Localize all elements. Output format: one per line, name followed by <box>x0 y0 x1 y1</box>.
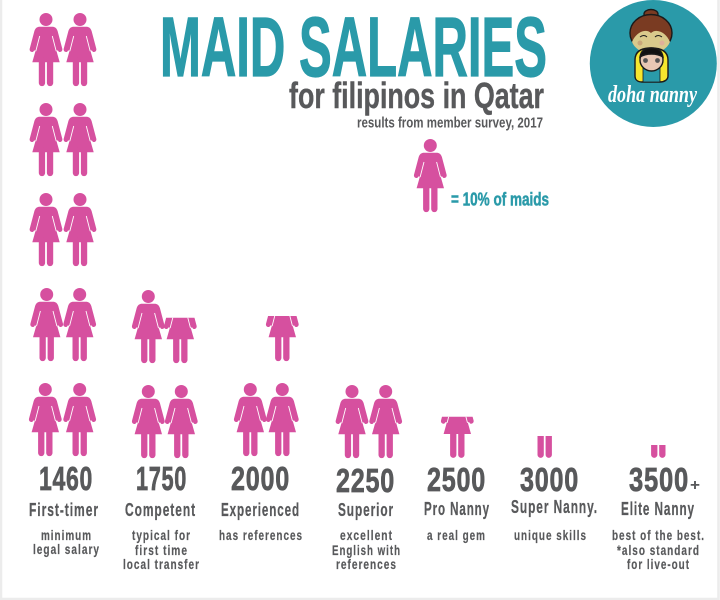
description: legal salary <box>33 541 100 557</box>
column: 3500+ Elite Nanny <box>612 445 704 570</box>
column: 1750 Competent <box>123 290 200 572</box>
description <box>612 527 705 572</box>
level: Pro Nanny <box>424 499 490 519</box>
description: typical for <box>132 527 191 543</box>
salary: 3000 <box>520 461 579 498</box>
level: Experienced <box>221 500 300 520</box>
description <box>123 527 200 572</box>
pictogram stack: 10 women <box>29 13 96 453</box>
subtitle: for filipinos in Qatar <box>289 75 544 116</box>
description: unique skills <box>514 527 587 543</box>
description: has references <box>219 527 303 543</box>
pictogram: partial woman <box>651 445 666 458</box>
description: English with <box>332 542 401 558</box>
legend <box>414 139 549 210</box>
description: references <box>336 556 397 572</box>
description: for live-out <box>627 556 690 572</box>
description: local transfer <box>123 556 200 572</box>
column: 2500 Pro Nanny <box>424 416 490 544</box>
level: Superior <box>338 500 394 520</box>
salary: 1750 <box>136 460 187 497</box>
column: 2000 Experienced <box>220 316 302 540</box>
column: 2250 Superior <box>332 385 402 572</box>
description: excellent <box>340 527 393 543</box>
column: 3000 Super Nanny <box>511 436 596 544</box>
description <box>33 527 100 557</box>
salary: 2500 <box>427 461 486 498</box>
column: 1460 First-timer <box>29 13 100 557</box>
pictogram stack: 2.5 women <box>234 316 299 456</box>
salary: 1460 <box>39 460 93 497</box>
salary: 3500 <box>629 461 689 498</box>
salary: 2250 <box>336 462 395 499</box>
pictogram: partial woman <box>538 436 552 458</box>
pictogram: partial woman <box>440 416 474 458</box>
plus sign: + <box>690 477 700 494</box>
description: a real gem <box>427 527 486 543</box>
description: first time <box>135 542 188 558</box>
survey note: results from member survey, 2017 <box>357 114 543 132</box>
salary: 2000 <box>231 460 290 497</box>
description <box>332 527 401 572</box>
description: minimum <box>41 527 92 543</box>
level: First-timer <box>29 500 99 520</box>
pictogram stack: 2 women <box>336 385 402 455</box>
pictogram stack: 3.5 women <box>132 290 198 455</box>
level: Super Nanny. <box>511 497 598 517</box>
legend icon: woman <box>414 139 447 209</box>
logo illustration: mother and child <box>630 10 672 82</box>
logo: doha nanny <box>590 0 717 127</box>
legend label: = 10% of maids <box>451 190 549 210</box>
level: Competent <box>125 500 196 520</box>
